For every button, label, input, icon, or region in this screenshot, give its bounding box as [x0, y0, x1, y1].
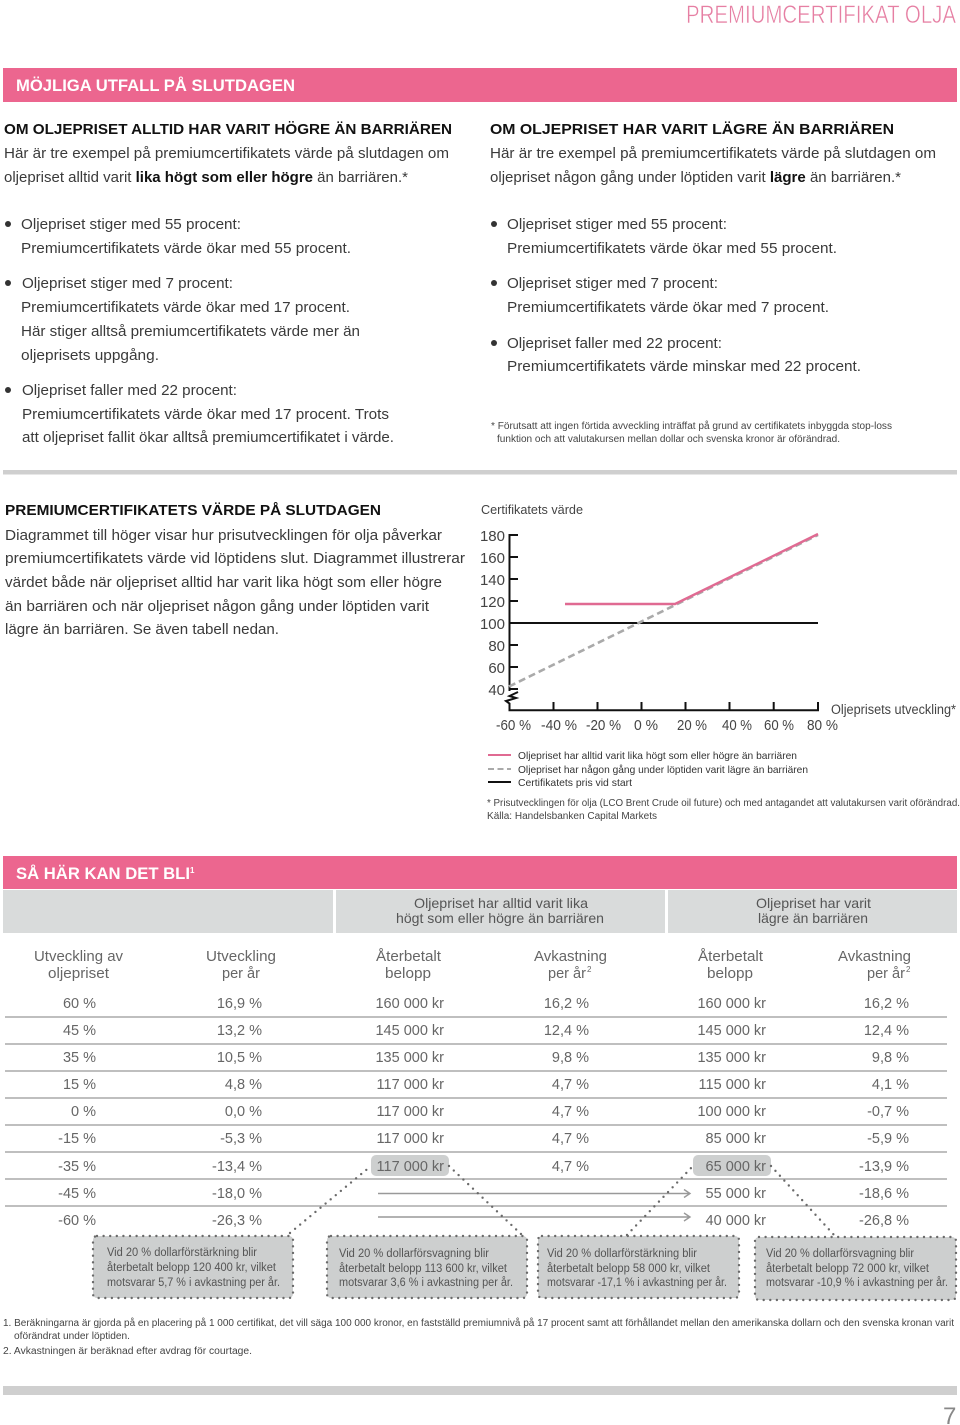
body text: chart description: värdet både när oljepriset alltid har varit lika högt som eller högre	[5, 574, 442, 591]
row -35 %: 117 000 kr	[377, 1159, 444, 1175]
bullet: oil up 55	[5, 216, 351, 257]
row -45 %: 55 000 kr	[706, 1186, 766, 1202]
callout: 113 600 kr: motsvarar 3,6 % i avkastning per år.	[339, 1277, 513, 1289]
table group headers: högt som eller högre än barriären	[396, 910, 604, 926]
row 35 %: 9,8 %	[872, 1050, 909, 1066]
row 35 %: 35 %	[63, 1050, 96, 1066]
row 35 %: 135 000 kr	[697, 1050, 766, 1066]
y axis title: Certifikatets värde	[481, 502, 583, 517]
row -60 %: -26,8 %	[859, 1213, 909, 1229]
bullet: oil down 22	[5, 382, 394, 446]
chart legend: Certifikatets pris vid start	[518, 777, 632, 789]
chart legend: Oljepriset har någon gång under löptiden varit lägre än barriären	[518, 764, 808, 776]
x axis labels	[496, 717, 838, 734]
body text: chart description	[5, 527, 465, 638]
row 15 %: 117 000 kr	[377, 1077, 444, 1093]
bullet: oil up 7: Premiumcertifikatets värde ökar med 7 procent.	[507, 299, 829, 316]
y axis labels	[480, 528, 505, 699]
table column headers: Utveckling	[206, 949, 276, 965]
intro text: below barrier: oljepriset någon gång under löptiden varit lägre än barriären.*	[490, 169, 901, 186]
y axis labels: 100	[480, 616, 505, 633]
panel: barrier never breached	[4, 121, 452, 446]
row 45 %: 145 000 kr	[697, 1023, 766, 1039]
row 0 %: 0,0 %	[225, 1104, 262, 1120]
x axis title: Oljeprisets utveckling*	[831, 702, 957, 717]
table column headers: oljepriset	[48, 966, 109, 982]
section heading: så här kan det bli: SÅ HÄR KAN DET BLI	[16, 864, 190, 883]
row -60 %: -26,3 %	[212, 1213, 262, 1229]
y axis labels: 160	[480, 550, 505, 567]
callout: 120 400 kr: Vid 20 % dollarförstärkning blir	[107, 1247, 257, 1259]
row 15 %: 4,7 %	[552, 1077, 589, 1093]
footnote: stop-loss: funktion och att valutakursen mellan dollar och svenska kronor är oförändrad.	[497, 434, 840, 445]
line chart: certificate value vs oil price	[480, 502, 957, 734]
row 35 %	[63, 1050, 909, 1066]
chart legend	[488, 750, 808, 789]
row -35 %: -13,4 %	[212, 1159, 262, 1175]
table footnotes: oförändrat under löptiden.	[14, 1331, 130, 1342]
row 15 %: 4,1 %	[872, 1077, 909, 1093]
bullet: oil up 7: Oljepriset stiger med 7 procent:	[22, 275, 233, 292]
bullet: oil down 22: Oljepriset faller med 22 procent:	[22, 382, 237, 399]
body text: chart description: än barriären och när oljepriset någon gång under löptiden varit	[5, 598, 430, 615]
bullet: oil down 22: Premiumcertifikatets värde ökar med 17 procent. Trots	[22, 406, 389, 423]
bullet: oil up 55: Oljepriset stiger med 55 procent:	[21, 216, 241, 233]
row 45 %: 145 000 kr	[375, 1023, 444, 1039]
intro text: below barrier	[490, 145, 936, 186]
bullet: oil down 22: Premiumcertifikatets värde minskar med 22 procent.	[507, 358, 861, 375]
table: outcomes	[5, 996, 947, 1229]
row 0 %: 0 %	[71, 1104, 96, 1120]
callout: 58 000 kr: Vid 20 % dollarförstärkning blir	[547, 1248, 697, 1260]
panel: barrier breached	[490, 121, 936, 445]
x axis labels: 40 %	[722, 717, 752, 734]
x axis labels: -40 %	[541, 717, 577, 734]
section heading: så här kan det bli	[3, 856, 957, 889]
row -15 %: -5,3 %	[220, 1131, 262, 1147]
row 0 %	[71, 1104, 909, 1120]
row 45 %: 12,4 %	[544, 1023, 589, 1039]
row -60 %	[58, 1213, 909, 1229]
callout: 58 000 kr	[538, 1236, 739, 1298]
row -35 %	[58, 1159, 909, 1175]
line: start price	[509, 622, 818, 624]
footnote: stop-loss	[491, 420, 892, 445]
row 60 %: 16,2 %	[864, 996, 909, 1012]
row -45 %: -18,0 %	[212, 1186, 262, 1202]
line: barrier breached (dashed)	[509, 535, 818, 686]
callout: 72 000 kr: återbetalt belopp 72 000 kr, vilket	[766, 1263, 930, 1275]
table column headers: Avkastning	[838, 949, 911, 965]
chart footnote and source: Källa: Handelsbanken Capital Markets	[487, 811, 657, 822]
row -60 %: 40 000 kr	[706, 1213, 766, 1229]
row -15 %: 4,7 %	[552, 1131, 589, 1147]
callout: 58 000 kr: motsvarar -17,1 % i avkastning per år.	[547, 1277, 727, 1289]
callout: 113 600 kr: återbetalt belopp 113 600 kr, vilket	[339, 1263, 508, 1275]
table column headers: Återbetalt	[376, 948, 441, 965]
callout: 72 000 kr: Vid 20 % dollarförsvagning blir	[766, 1248, 914, 1260]
table footnotes: 1. Beräkningarna är gjorda på en placering på 1 000 certifikat, det vill säga 100 000 kronor, en fastställd premiumnivå på 17 procent samt att förhållandet mellan den amerikanska dollarn och den svenska kronan varit	[3, 1317, 954, 1329]
x axis labels: 60 %	[764, 717, 794, 734]
table column headers: Utveckling av	[34, 949, 124, 965]
body text: chart description: premiumcertifikatets värde vid löptidens slut. Diagrammet illustrerar	[5, 550, 465, 567]
section heading: så här kan det bli: 1	[190, 866, 195, 875]
row 0 %: 117 000 kr	[377, 1104, 444, 1120]
table column headers: 2	[587, 965, 592, 974]
table column headers: per år	[867, 966, 905, 982]
table column headers	[34, 948, 911, 982]
row -35 %: -13,9 %	[859, 1159, 909, 1175]
chart legend: Oljepriset har alltid varit lika högt som eller högre än barriären	[518, 750, 797, 762]
heading: value at end date: PREMIUMCERTIFIKATETS VÄRDE PÅ SLUTDAGEN	[5, 502, 381, 519]
y axis with ticks	[506, 534, 518, 711]
section heading: möjliga utfall	[3, 68, 957, 102]
row -45 %: -45 %	[58, 1186, 96, 1202]
row -35 %: -35 %	[58, 1159, 96, 1175]
intro text: above barrier: Här är tre exempel på premiumcertifikatets värde på slutdagen om	[4, 145, 449, 162]
row 15 %: 115 000 kr	[699, 1077, 766, 1093]
x axis labels: -60 %	[496, 717, 531, 734]
y axis labels: 40	[488, 682, 505, 699]
bullet: oil down 22: att oljepriset fallit ökar alltså premiumcertifikatet i värde.	[22, 429, 394, 446]
row 35 %: 10,5 %	[217, 1050, 262, 1066]
row 60 %: 160 000 kr	[375, 996, 444, 1012]
row -15 %: 117 000 kr	[377, 1131, 444, 1147]
table group headers: Oljepriset har varit	[756, 895, 871, 911]
row -60 %: -60 %	[58, 1213, 96, 1229]
dotted connectors	[290, 1166, 834, 1235]
bullet: oil down 22	[491, 335, 861, 375]
x axis with ticks	[508, 702, 819, 711]
heading: above barrier: OM OLJEPRISET ALLTID HAR VARIT HÖGRE ÄN BARRIÄREN	[4, 121, 452, 138]
bullet: oil up 55	[491, 216, 837, 257]
row 60 %: 160 000 kr	[697, 996, 766, 1012]
row -15 %: -15 %	[58, 1131, 96, 1147]
row -15 %: 85 000 kr	[706, 1131, 766, 1147]
intro text: above barrier	[4, 145, 449, 186]
row 45 %: 12,4 %	[864, 1023, 909, 1039]
table group headers: Oljepriset har alltid varit lika	[414, 895, 588, 911]
table column headers: per år	[548, 966, 586, 982]
heading: below barrier: OM OLJEPRISET HAR VARIT LÄGRE ÄN BARRIÄREN	[490, 121, 894, 138]
x axis labels: 80 %	[807, 717, 838, 734]
bullet: oil up 55: Premiumcertifikatets värde ökar med 55 procent.	[21, 240, 351, 257]
row 60 %	[63, 996, 909, 1012]
bullet: oil up 7: oljeprisets uppgång.	[21, 347, 159, 364]
callout: 113 600 kr: Vid 20 % dollarförsvagning blir	[339, 1248, 489, 1260]
row 45 %: 45 %	[63, 1023, 96, 1039]
highlight: 65 000 kr	[693, 1155, 771, 1176]
line: barrier not breached	[565, 534, 818, 604]
x axis labels: 0 %	[634, 717, 658, 734]
row 60 %: 16,9 %	[217, 996, 262, 1012]
table footnotes: 2. Avkastningen är beräknad efter avdrag för courtage.	[3, 1346, 252, 1357]
row 60 %: 60 %	[63, 996, 96, 1012]
footnote: stop-loss: * Förutsatt att ingen förtida avveckling inträffat på grund av certifikatets inbyggda stop-loss	[491, 420, 892, 432]
row 45 %: 13,2 %	[217, 1023, 262, 1039]
row -35 %: 65 000 kr	[706, 1159, 766, 1175]
table group headers	[3, 890, 957, 933]
row 45 %	[63, 1023, 909, 1039]
y axis labels: 60	[488, 660, 505, 677]
chart footnote and source: * Prisutvecklingen för olja (LCO Brent Crude oil future) och med antagandet att valutakursen varit oförändrad.	[487, 798, 960, 809]
row -45 %: -18,6 %	[859, 1186, 909, 1202]
table column headers: Avkastning	[534, 949, 607, 965]
arrow: row -45 %	[378, 1190, 690, 1198]
bullet: oil up 7: Oljepriset stiger med 7 procent:	[507, 275, 718, 292]
bullet: oil down 22: Oljepriset faller med 22 procent:	[507, 335, 722, 352]
row 60 %: 16,2 %	[544, 996, 589, 1012]
row 35 %: 135 000 kr	[375, 1050, 444, 1066]
table column headers: 2	[906, 965, 911, 974]
y axis labels: 120	[480, 594, 505, 611]
x axis labels: -20 %	[586, 717, 621, 734]
table column headers: per år	[222, 966, 260, 982]
row -45 %	[58, 1186, 909, 1202]
row 15 %: 4,8 %	[225, 1077, 262, 1093]
row 0 %: -0,7 %	[867, 1104, 909, 1120]
row 15 %	[63, 1077, 909, 1093]
y axis labels: 80	[488, 638, 505, 655]
body text: chart description: Diagrammet till höger visar hur prisutvecklingen för olja påverkar	[5, 527, 442, 544]
table group headers: lägre än barriären	[758, 910, 868, 926]
callout: 72 000 kr	[755, 1237, 956, 1300]
callout: 120 400 kr	[93, 1236, 293, 1298]
table column headers: belopp	[707, 966, 753, 982]
row 0 %: 100 000 kr	[697, 1104, 766, 1120]
chart footnote and source	[487, 798, 960, 822]
row -15 %: -5,9 %	[867, 1131, 909, 1147]
row 15 %: 15 %	[63, 1077, 96, 1093]
bullet: oil up 7	[5, 275, 360, 364]
intro text: below barrier: Här är tre exempel på premiumcertifikatets värde på slutdagen om	[490, 145, 936, 162]
callout: 58 000 kr: återbetalt belopp 58 000 kr, vilket	[547, 1263, 711, 1275]
callout: 113 600 kr	[327, 1236, 527, 1298]
x axis labels: 20 %	[677, 717, 707, 734]
table footnotes	[3, 1317, 954, 1357]
bullet: oil up 7: Här stiger alltså premiumcertifikatets värde mer än	[21, 323, 360, 340]
table column headers: belopp	[385, 966, 431, 982]
callout: 72 000 kr: motsvarar -10,9 % i avkastning per år.	[766, 1277, 948, 1289]
y axis labels: 180	[480, 528, 505, 545]
bullet: oil up 7	[491, 275, 829, 316]
highlight: 117 000 kr	[371, 1155, 449, 1176]
intro text: above barrier: oljepriset alltid varit lika högt som eller högre än barriären.*	[4, 169, 408, 186]
callout: 120 400 kr: motsvarar 5,7 % i avkastning per år.	[107, 1277, 280, 1289]
row 0 %: 4,7 %	[552, 1104, 589, 1120]
table column headers: Återbetalt	[698, 948, 763, 965]
section heading: möjliga utfall: MÖJLIGA UTFALL PÅ SLUTDAGEN	[16, 76, 295, 95]
body text: chart description: lägre än barriären. Se även tabell nedan.	[5, 621, 279, 638]
callout: 120 400 kr: återbetalt belopp 120 400 kr, vilket	[107, 1262, 277, 1274]
bullet: oil up 55: Oljepriset stiger med 55 procent:	[507, 216, 727, 233]
row 35 %: 9,8 %	[552, 1050, 589, 1066]
bullet: oil up 7: Premiumcertifikatets värde ökar med 17 procent.	[21, 299, 350, 316]
y axis labels: 140	[480, 572, 505, 589]
arrow: row -60 %	[378, 1213, 690, 1221]
bullet: oil up 55: Premiumcertifikatets värde ökar med 55 procent.	[507, 240, 837, 257]
row -35 %: 4,7 %	[552, 1159, 589, 1175]
row -15 %	[58, 1131, 909, 1147]
panel: value at end date text	[5, 502, 465, 638]
